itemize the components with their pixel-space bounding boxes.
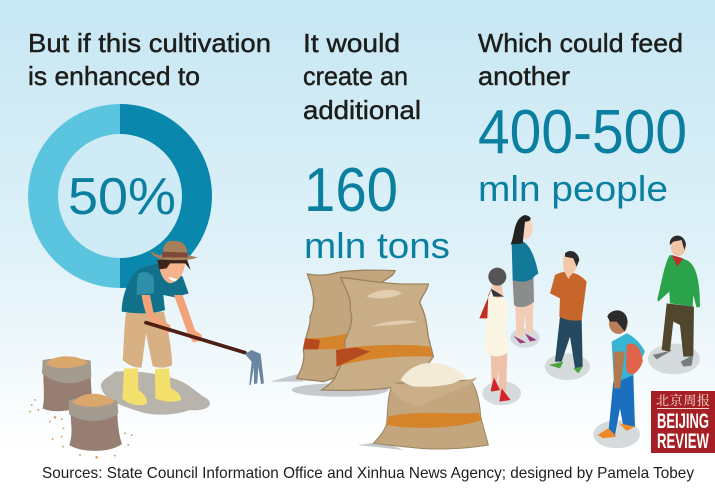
left sack — [42, 356, 92, 411]
shadows — [270, 373, 303, 382]
back sack — [297, 270, 395, 382]
logo chinese title: 北京周报 — [656, 390, 710, 409]
stat: 160 mln tons: mln tons — [304, 225, 450, 266]
donut value: 50% — [68, 168, 176, 226]
middle sack — [322, 277, 433, 390]
heading: feed — [478, 28, 683, 91]
woman in blue — [511, 215, 538, 343]
hoe handle — [146, 323, 245, 353]
stat: 160 mln tons — [304, 156, 450, 266]
trousers — [123, 312, 172, 368]
illustration: farmer with grain sacks — [29, 241, 264, 459]
source note: Sources: State Council Information Office and Xinhua News Agency; designed by Pamela Tobey — [42, 465, 694, 482]
head — [159, 260, 185, 283]
arms — [142, 295, 172, 335]
logo: Beijing Review — [651, 390, 715, 453]
front sack — [373, 363, 488, 449]
heading: cultivation: is enhanced to — [28, 61, 200, 91]
donut chart — [28, 104, 212, 288]
hoe head — [245, 350, 264, 385]
spilled grain — [29, 399, 133, 459]
ground shadows — [482, 328, 700, 448]
heading: feed: Which could feed — [478, 28, 683, 58]
stat: 400-500 mln people: mln people — [478, 168, 668, 209]
logo wordmark — [657, 410, 709, 453]
sleeve — [137, 272, 154, 295]
boots — [122, 368, 147, 405]
stat: 160 mln tons: 160 — [304, 156, 398, 225]
heading: additional: create an — [303, 61, 408, 91]
illustration: grain sacks — [270, 270, 488, 450]
heading: additional: additional — [303, 95, 421, 125]
heading: feed: another — [478, 61, 570, 91]
stat: 400-500 mln people — [478, 98, 687, 209]
puddle — [101, 371, 210, 415]
boy with backpack — [597, 310, 645, 438]
heading: cultivation: But if this cultivation — [28, 28, 271, 58]
man in orange — [548, 251, 587, 373]
hat — [150, 241, 197, 260]
stat: 400-500 mln people: 400-500 — [478, 98, 687, 167]
heading: cultivation — [28, 28, 271, 91]
shirt — [122, 263, 189, 313]
illustration: people — [479, 215, 700, 448]
front sack — [69, 394, 122, 451]
man in green — [653, 236, 700, 367]
heading: additional: It would — [303, 28, 400, 58]
woman in white dress — [479, 268, 511, 402]
heading: additional — [303, 28, 421, 125]
